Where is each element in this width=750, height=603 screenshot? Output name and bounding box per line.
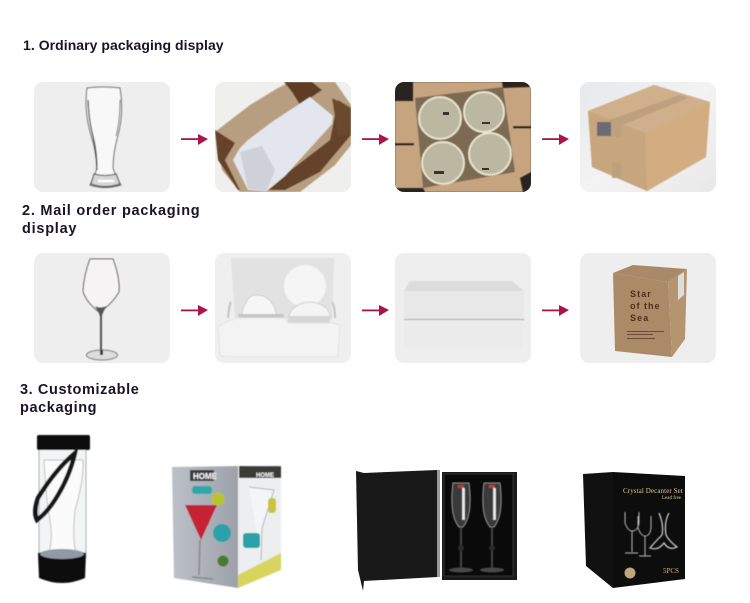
heading line: display: display xyxy=(22,221,77,237)
icon: torn cardboard and wrapped glass xyxy=(215,82,351,192)
heading: mail order packaging: 2. Mail order packaging xyxy=(22,203,200,219)
arrow xyxy=(181,305,208,316)
panel: wine glass xyxy=(34,253,170,363)
panel: beer glass xyxy=(34,82,170,192)
icon: open carton xyxy=(395,82,531,192)
panel: wrapped glass in cardboard xyxy=(215,82,351,192)
heading: ordinary packaging: 1. Ordinary packaging display xyxy=(23,37,224,53)
panel: sealed carton xyxy=(580,82,716,192)
product: cylinder tube with strap xyxy=(35,435,90,583)
icon: glasses and decanter xyxy=(625,512,677,556)
box pieces label: 5PCS xyxy=(663,567,679,575)
icon: foam blocks xyxy=(404,281,524,349)
icon: carton box: of the xyxy=(630,301,660,311)
icon: champagne flutes xyxy=(449,483,504,572)
arrow xyxy=(362,305,389,316)
product: cocktail glass box: HOME xyxy=(193,472,218,481)
arrow xyxy=(362,134,389,145)
icon: foam insert xyxy=(218,258,340,357)
heading: customizable packaging: 3. Customizable xyxy=(20,382,139,398)
product: cocktail glass box xyxy=(172,465,281,588)
panel: star of the sea carton xyxy=(580,253,716,363)
icon: beer glass xyxy=(86,87,122,188)
box title: Crystal Decanter Set xyxy=(623,487,683,495)
icon: carton box: Sea xyxy=(630,313,649,323)
box subtitle: Lead free xyxy=(662,496,682,501)
product: cocktail glass box: HOME xyxy=(256,473,274,479)
box label: Star xyxy=(630,289,652,299)
icon: wine glass xyxy=(83,259,119,360)
arrow xyxy=(542,134,569,145)
arrow xyxy=(181,134,208,145)
product: crystal decanter set box xyxy=(583,472,685,588)
icon: carton box xyxy=(588,85,710,191)
icon: paper wrapped glass tops xyxy=(419,92,511,184)
panel: glasses packed in open carton xyxy=(395,82,531,192)
icon: carton box xyxy=(613,265,687,357)
product: open black gift box with flutes xyxy=(356,470,517,591)
arrow xyxy=(542,305,569,316)
panel: foam tray xyxy=(215,253,351,363)
heading line: packaging: packaging xyxy=(20,400,97,416)
panel: foam box closed xyxy=(395,253,531,363)
